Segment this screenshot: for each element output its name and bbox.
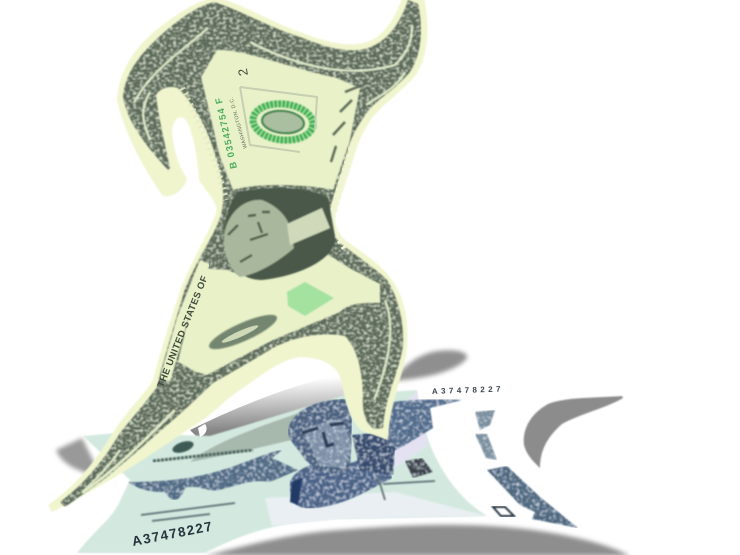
portrait: face xyxy=(302,418,352,468)
note shaded fold xyxy=(190,398,345,462)
pale lettering band xyxy=(165,262,205,380)
note paper xyxy=(77,390,487,553)
portrait collar xyxy=(287,208,330,245)
faint numeral outline xyxy=(240,87,317,152)
lower oval ornament xyxy=(206,309,280,355)
note security mark xyxy=(405,458,433,478)
serial number: B 03542754 F xyxy=(213,96,240,170)
tip pale streak xyxy=(82,410,175,493)
frame highlight streaks xyxy=(85,25,412,490)
left border ladder xyxy=(182,88,226,200)
seal ring xyxy=(251,101,315,143)
note pale lavender band xyxy=(265,492,487,526)
portrait facial features xyxy=(228,212,270,262)
engraved leaves xyxy=(128,450,298,500)
washington text: WASHINGTON, D.C. xyxy=(228,96,249,149)
green treasury seal xyxy=(251,101,315,143)
shadow: upper right of bill leg xyxy=(392,350,467,381)
portrait oval xyxy=(224,188,335,280)
portrait background xyxy=(224,188,335,280)
shadow: left note corner xyxy=(56,438,96,474)
pale halo outline xyxy=(48,0,427,512)
green note logo xyxy=(171,439,195,455)
bill pale face above portrait xyxy=(201,50,360,190)
portrait: eyes and nose xyxy=(302,423,344,446)
shadow: behind note top xyxy=(190,372,352,445)
numeral 1 xyxy=(487,466,578,528)
note micro text line xyxy=(153,450,253,461)
portrait head xyxy=(224,200,294,277)
right ornament xyxy=(380,399,462,452)
dollar bill xyxy=(48,0,427,512)
vertical script xyxy=(475,410,497,460)
serial number top: A37478227 xyxy=(432,384,504,396)
bill pale face below portrait xyxy=(178,254,380,375)
right border ladder xyxy=(330,148,352,248)
small script lines xyxy=(141,477,435,521)
serial number bottom: A37478227 xyxy=(131,518,214,549)
shadow: under the note bottom edge xyxy=(205,525,630,555)
bill engraved frame xyxy=(60,0,421,507)
portrait: hair xyxy=(288,399,352,473)
dark wing under the leg xyxy=(352,432,395,475)
lari banknote xyxy=(77,384,578,553)
note pink tint xyxy=(388,392,428,468)
denomination 2: 2 xyxy=(235,67,251,77)
seal center xyxy=(261,109,305,135)
border lettering: THE UNITED STATES OF xyxy=(156,274,211,389)
shadow: right curved note corner xyxy=(524,396,623,468)
note white spot xyxy=(198,424,207,437)
portrait: dark lapel xyxy=(290,478,302,505)
light green seal xyxy=(287,282,334,316)
numeral 0 xyxy=(493,507,514,516)
signature xyxy=(331,86,360,162)
portrait: coat xyxy=(290,440,392,508)
oval center xyxy=(221,323,259,345)
